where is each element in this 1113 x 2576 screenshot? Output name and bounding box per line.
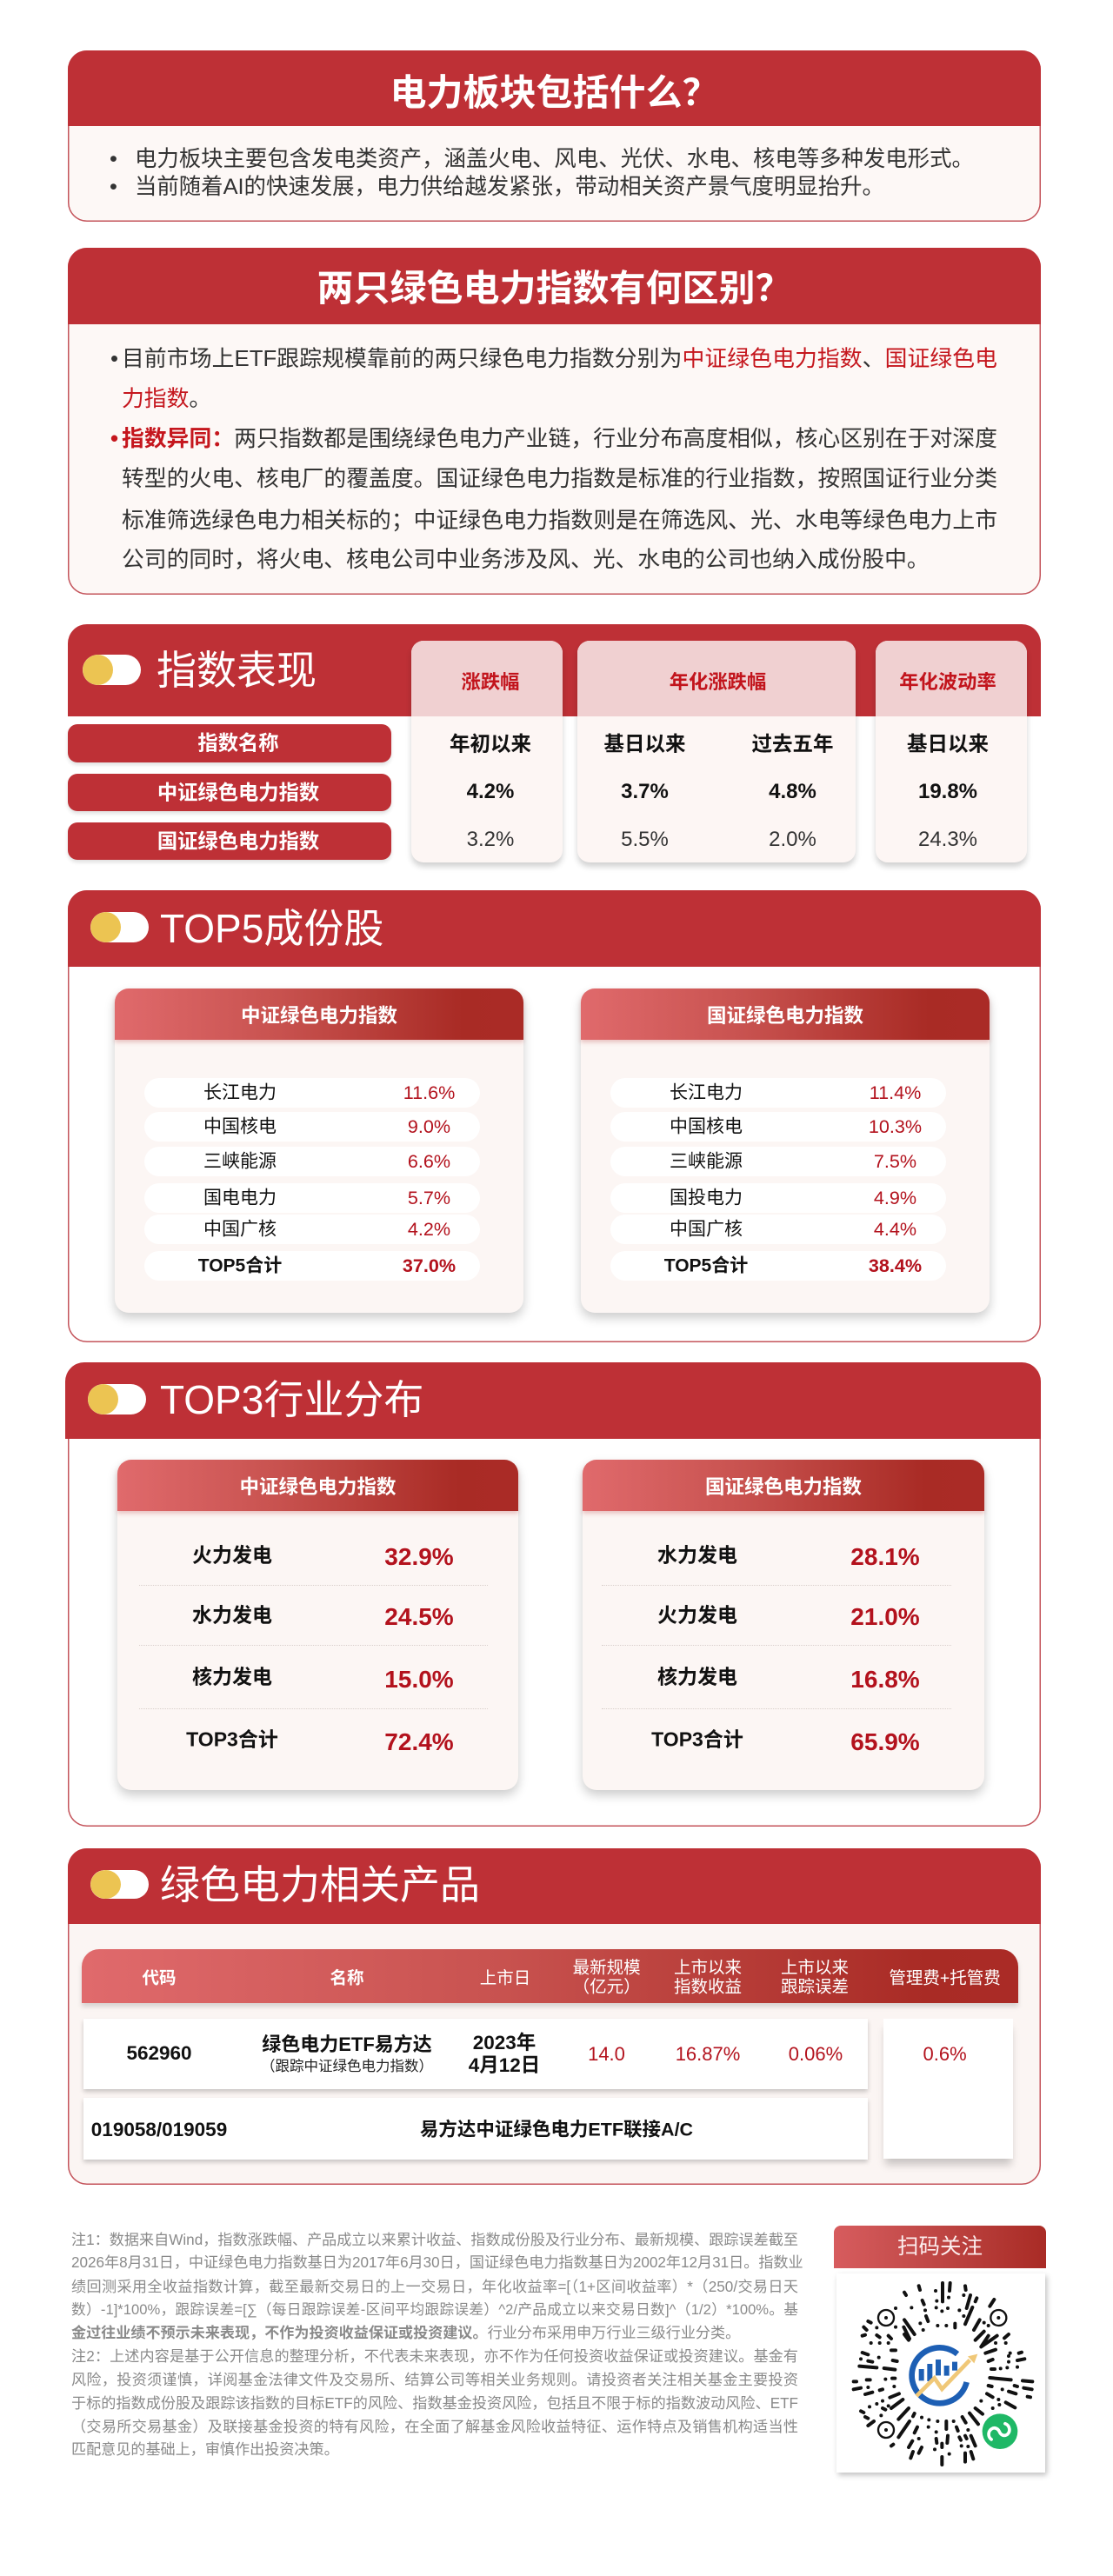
card: CSI green power top 5: TOP5合计 <box>198 1255 282 1276</box>
column: 年化涨跌幅: 5.5% <box>621 828 669 851</box>
column: 涨跌幅 <box>411 641 563 862</box>
icon: toggle <box>83 655 141 685</box>
footnotes: 2026年8月31日，中证绿色电力指数基日为2017年6月30日，国证绿色电力指数基日为2002年12月31日。指数业 <box>71 2254 803 2271</box>
card: CSI industry top 3: 中证绿色电力指数 <box>239 1476 397 1498</box>
footnotes: （交易所交易基金）及联接基金投资的特有风险，在全面了解基金风险收益特征、运作特点及销售机构适当性 <box>71 2419 798 2435</box>
card: CNI green power top 5: 中国核电 <box>670 1116 743 1137</box>
table row: ETF: 562960 <box>126 2042 192 2064</box>
card: CNI green power top 5: 10.3% <box>869 1115 922 1137</box>
column: 年化涨跌幅: 3.7% <box>621 780 669 803</box>
footnotes <box>71 2232 803 2458</box>
card: CNI green power top 5: 中国广核 <box>670 1219 743 1240</box>
card: CNI green power top 5: 38.4% <box>869 1255 922 1276</box>
column: 年化涨跌幅: 基日以来 <box>603 732 685 755</box>
card: CSI industry top 3: 水力发电 <box>192 1603 272 1626</box>
heading text: 电力板块包括什么？ <box>390 72 719 113</box>
body paragraphs: 指数异同：两只指数都是围绕绿色电力产业链，行业分布高度相似，核心区别在于对深度 <box>122 427 997 451</box>
table header: 指数收益 <box>674 1977 742 1996</box>
row label: 指数名称 <box>68 724 391 762</box>
footnotes: 注1：数据来自Wind，指数涨跌幅、产品成立以来累计收益、指数成份股及行业分布、最新规模、跟踪误差截至 <box>71 2232 798 2248</box>
bullet list: 电力板块主要包含发电类资产，涵盖火电、风电、光伏、水电、核电等多种发电形式。 <box>135 147 974 171</box>
bullet list: 当前随着AI的快速发展，电力供给越发紧张，带动相关资产景气度明显抬升。 <box>135 174 884 198</box>
panel: scan to follow QR <box>834 2226 1050 2478</box>
card: CSI industry top 3: 32.9% <box>384 1543 454 1570</box>
card: CNI industry top 3: 水力发电 <box>657 1543 737 1566</box>
footnotes: 匹配意见的基础上，审慎作出投资决策。 <box>71 2441 339 2458</box>
header band <box>68 624 1041 716</box>
card: CNI industry top 3: 核力发电 <box>657 1666 737 1688</box>
section title: 指数表现 <box>157 648 317 693</box>
table header <box>82 1949 1018 2003</box>
column: 年化涨跌幅: 2.0% <box>769 828 816 851</box>
table row: ETF: 绿色电力ETF易方达 <box>262 2034 432 2055</box>
header band <box>68 1848 1041 1924</box>
body paragraphs <box>110 346 997 572</box>
table header: 跟踪误差 <box>781 1977 849 1996</box>
column: 年化涨跌幅: 过去五年 <box>751 732 833 755</box>
icon: center logo <box>903 2338 977 2406</box>
card: CNI industry top 3: 16.8% <box>850 1666 920 1693</box>
panel: index performance table <box>67 624 1041 869</box>
panel: green power related products <box>68 1848 1041 2185</box>
card: CNI green power top 5: 4.4% <box>874 1218 916 1240</box>
footnotes: 于标的指数成份股及跟踪该指数的目标ETF的风险、指数基金投资风险，包括且不限于标的指数波动风险、ETF <box>71 2395 798 2412</box>
header band <box>65 1362 1041 1439</box>
QR card <box>836 2273 1045 2473</box>
table row: feeder fund: 019058/019059 <box>91 2119 227 2140</box>
card: CNI green power top 5: TOP5合计 <box>664 1255 748 1276</box>
body paragraphs: 转型的火电、核电厂的覆盖度。国证绿色电力指数是标准的行业指数，按照国证行业分类 <box>122 467 997 491</box>
card: CSI industry top 3: 15.0% <box>384 1666 454 1693</box>
table header: 上市日 <box>480 1968 530 1987</box>
card: CSI green power top 5: 9.0% <box>408 1115 450 1137</box>
icon: toggle <box>90 1870 149 1899</box>
section title: TOP3行业分布 <box>160 1377 423 1422</box>
table row: ETF: 0.06% <box>789 2043 843 2065</box>
icon: mini program badge <box>983 2413 1017 2449</box>
footnotes: 风险，投资须谨慎，详阅基金法律文件及交易所、结算公司等相关业务规则。请投资者关注相关基金主要投资 <box>71 2372 798 2388</box>
card: CNI industry top 3: 65.9% <box>850 1728 920 1754</box>
panel: difference between the two indexes <box>68 248 1041 595</box>
column: 年化涨跌幅: 年化涨跌幅 <box>670 671 766 693</box>
card: CNI green power top 5: 国投电力 <box>670 1188 743 1208</box>
fee column <box>883 2019 1013 2159</box>
column: 年化涨跌幅 <box>577 641 856 862</box>
column: 年化波动率: 基日以来 <box>907 732 989 755</box>
bullet list: • <box>110 174 117 198</box>
card: CNI industry top 3: 国证绿色电力指数 <box>705 1476 862 1498</box>
row label: 国证绿色电力指数 <box>68 822 391 860</box>
table row: ETF <box>83 2019 868 2089</box>
card: CSI green power top 5: 长江电力 <box>203 1082 277 1102</box>
table header: 最新规模 <box>573 1958 641 1977</box>
card: CSI green power top 5: 37.0% <box>403 1255 456 1276</box>
table header: 管理费+托管费 <box>889 1968 1001 1987</box>
card: CNI green power top 5: 长江电力 <box>670 1082 743 1102</box>
panel: TOP3 industry distribution <box>65 1362 1041 1827</box>
row label: 中证绿色电力指数: 中证绿色电力指数 <box>157 781 319 803</box>
table header: （亿元） <box>573 1977 641 1996</box>
body paragraphs: 目前市场上ETF跟踪规模靠前的两只绿色电力指数分别为中证绿色电力指数、国证绿色电 <box>122 346 997 370</box>
column: 年化波动率 <box>876 641 1027 862</box>
fee column: 0.6% <box>923 2043 967 2065</box>
card: CSI green power top 5: 5.7% <box>408 1187 450 1208</box>
card: CSI green power top 5: 中证绿色电力指数 <box>241 1005 397 1027</box>
bullet list: • <box>110 147 117 171</box>
card: CNI green power top 5: 11.4% <box>870 1082 921 1103</box>
card: CSI industry top 3: 火力发电 <box>192 1543 272 1566</box>
footnotes: 绩回测采用全收益指数计算，截至最新交易日的上一交易日，年化收益率=[（1+区间收益率）*（250/交易日天 <box>71 2279 798 2295</box>
column: 年化波动率: 19.8% <box>918 780 977 803</box>
panel: what the power sector includes <box>68 50 1041 222</box>
row label: 中证绿色电力指数 <box>68 774 391 811</box>
row label: 国证绿色电力指数: 国证绿色电力指数 <box>157 829 319 852</box>
row label: 指数名称: 指数名称 <box>197 731 279 754</box>
card: CNI industry top 3 <box>583 1459 984 1789</box>
card: CNI green power top 5: 7.5% <box>874 1150 916 1172</box>
column: 年化波动率: 年化波动率 <box>899 671 996 693</box>
table row: ETF: （跟踪中证绿色电力指数） <box>261 2059 433 2074</box>
body paragraphs: 标准筛选绿色电力相关标的；中证绿色电力指数则是在筛选风、光、水电等绿色电力上市 <box>122 509 997 533</box>
icon: toggle <box>88 1384 146 1414</box>
card: CNI green power top 5 <box>581 988 990 1313</box>
column: 涨跌幅: 年初以来 <box>450 732 531 755</box>
body paragraphs: • <box>110 427 118 451</box>
card: CSI green power top 5: 中国核电 <box>203 1116 277 1137</box>
card: CSI industry top 3: TOP3合计 <box>186 1728 278 1751</box>
card: CNI industry top 3: 21.0% <box>850 1603 920 1630</box>
table row: ETF: 16.87% <box>676 2043 740 2065</box>
table row: feeder fund <box>83 2098 868 2160</box>
card: CSI industry top 3: 核力发电 <box>192 1666 272 1688</box>
card: CNI green power top 5: 4.9% <box>874 1187 916 1208</box>
icon: finder rings <box>878 2310 1006 2438</box>
body paragraphs: 公司的同时，将火电、核电公司中业务涉及风、光、水电的公司也纳入成份股中。 <box>122 548 930 572</box>
table header: 代码 <box>142 1968 177 1987</box>
body paragraphs: • <box>110 346 118 370</box>
section title: 绿色电力相关产品 <box>160 1862 480 1907</box>
card: CSI industry top 3 <box>117 1459 518 1789</box>
card: CSI green power top 5: 国电电力 <box>203 1188 277 1208</box>
column: 年化涨跌幅: 4.8% <box>769 780 816 803</box>
QR header <box>834 2226 1046 2268</box>
card: CSI green power top 5: 6.6% <box>408 1150 450 1172</box>
column: 涨跌幅: 3.2% <box>467 828 514 851</box>
footnotes: 注2：上述内容是基于公开信息的整理分析，不代表未来表现，亦不作为任何投资收益保证或投资建议。基金有 <box>71 2348 798 2365</box>
card: CNI green power top 5: 三峡能源 <box>670 1151 743 1172</box>
column: 年化波动率: 24.3% <box>918 828 977 851</box>
heading band: 两只绿色电力指数有何区别 <box>68 248 1041 324</box>
card: CSI green power top 5 <box>115 988 523 1313</box>
column: 涨跌幅: 4.2% <box>467 780 514 803</box>
section title: TOP5成份股 <box>160 906 383 951</box>
table row: feeder fund: 易方达中证绿色电力ETF联接A/C <box>420 2119 693 2140</box>
card: CSI green power top 5: 11.6% <box>403 1082 455 1103</box>
card: CNI green power top 5: 国证绿色电力指数 <box>707 1005 863 1027</box>
card: CSI industry top 3: 72.4% <box>384 1728 454 1754</box>
table header: 上市以来 <box>674 1958 742 1977</box>
card: CSI industry top 3: 24.5% <box>384 1603 454 1630</box>
panel: TOP5 constituents <box>68 890 1041 1342</box>
footnotes: 金过往业绩不预示未来表现，不作为投资收益保证或投资建议。行业分布采用申万行业三级行业分类。 <box>71 2325 740 2341</box>
table row: ETF: 4月12日 <box>469 2054 540 2076</box>
footnotes: 数）-1]*100%，跟踪误差=[∑（每日跟踪误差-区间平均跟踪误差）^2/产品成立以来交易日数]^（1/2）*100%。基 <box>71 2301 798 2318</box>
card: CSI green power top 5: 三峡能源 <box>203 1151 277 1172</box>
table row: ETF: 2023年 <box>473 2032 536 2053</box>
table row: ETF: 14.0 <box>588 2043 625 2065</box>
table header: 名称 <box>330 1968 364 1987</box>
card: CSI green power top 5: 4.2% <box>408 1218 450 1240</box>
body paragraphs: 力指数。 <box>122 387 211 411</box>
QR header: 扫码关注 <box>897 2235 983 2259</box>
card: CNI industry top 3: 火力发电 <box>657 1603 737 1626</box>
card: CSI green power top 5: 中国广核 <box>203 1219 277 1240</box>
bullet list <box>110 147 974 198</box>
heading band: 电力板块包括什么 <box>68 50 1041 126</box>
icon: mini-program code <box>852 2281 1035 2466</box>
column: 涨跌幅: 涨跌幅 <box>462 671 519 693</box>
card: CNI industry top 3: TOP3合计 <box>651 1728 743 1751</box>
heading text: 两只绿色电力指数有何区别？ <box>317 268 792 309</box>
header band <box>68 890 1041 967</box>
card: CNI industry top 3: 28.1% <box>850 1543 920 1570</box>
icon: toggle <box>90 912 149 942</box>
table header: 上市以来 <box>781 1958 849 1977</box>
